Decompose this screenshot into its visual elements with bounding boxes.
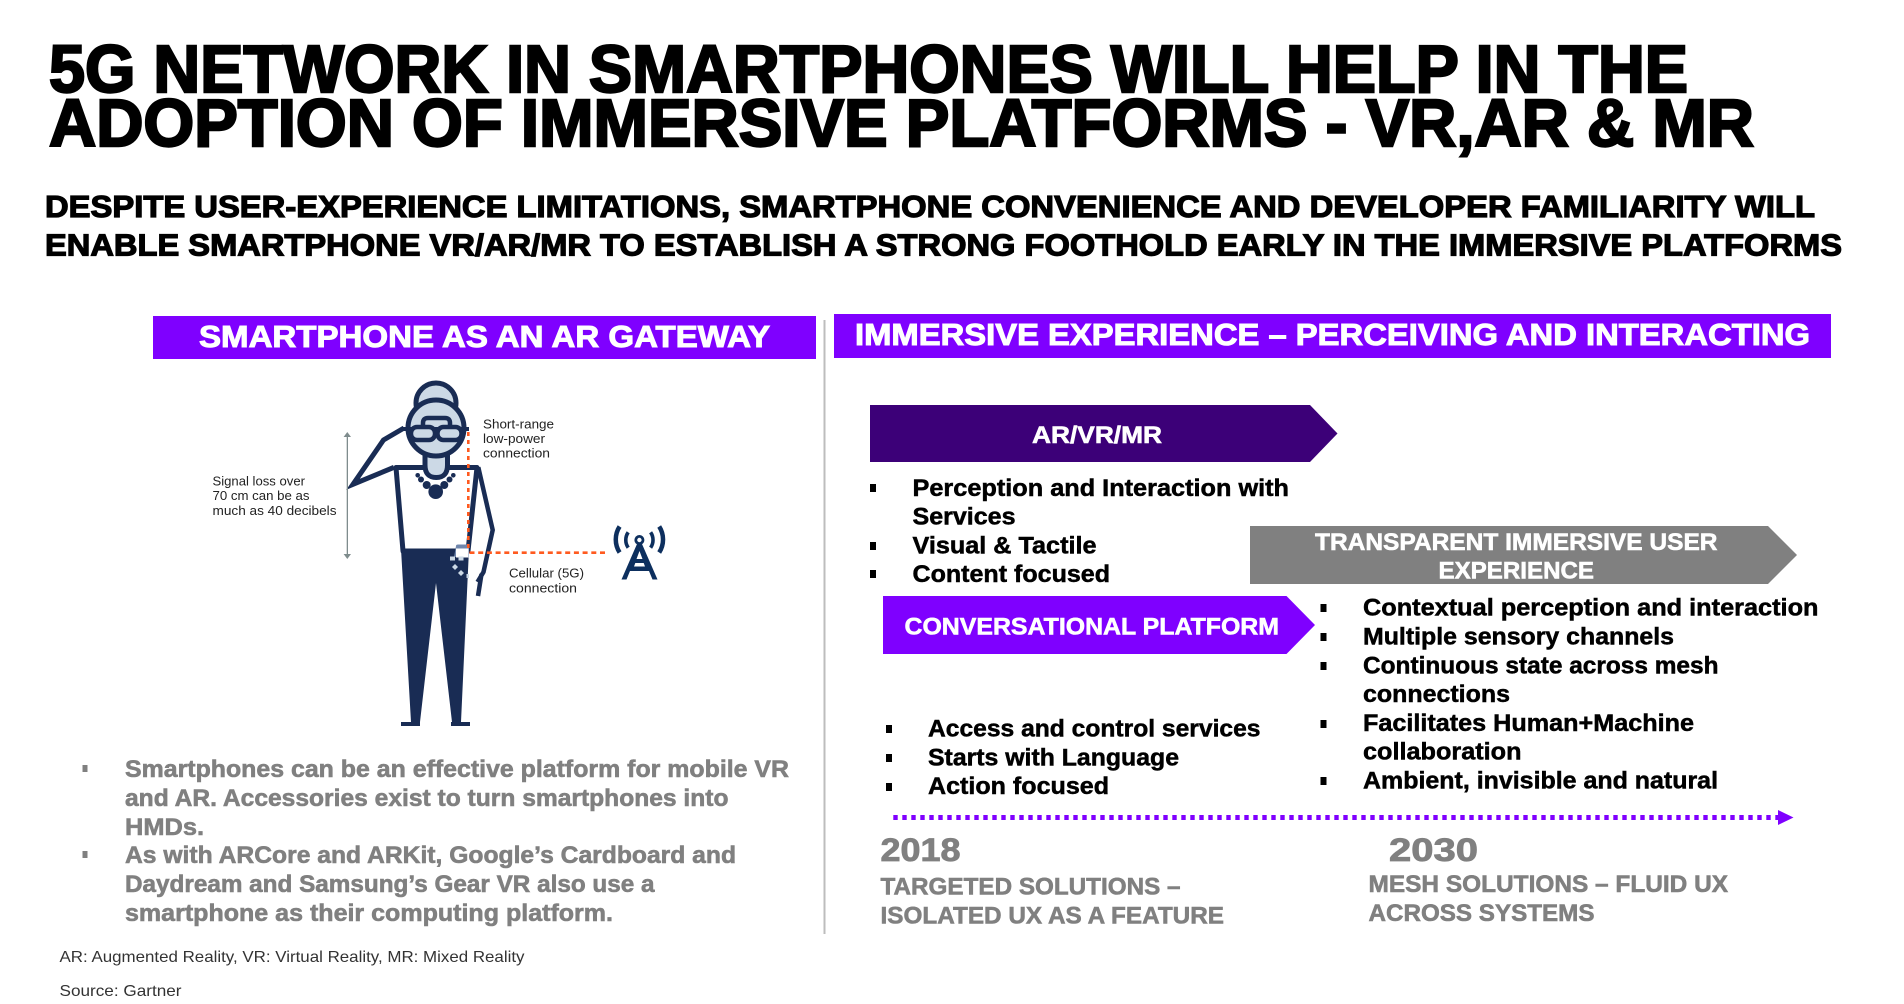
label: 2030: 2030 [1389,832,1478,868]
icon: phone [450,544,469,578]
arrow: transparent immersive user experience: EXPERIENCE [1438,558,1594,584]
label: cellular connection: Cellular (5G) [509,566,584,580]
list: transparent immersive traits [1320,594,1818,794]
label: cellular connection: connection [509,580,577,596]
torso [396,468,477,551]
list: conversational traits: Access and control services [928,716,1260,742]
neck [425,450,448,478]
list: conversational traits: Starts with Language [928,744,1179,772]
arrow: conversational platform [883,596,1315,654]
figure: person with smartphone [353,383,493,726]
label: short-range connection: connection [483,446,550,460]
text: mesh solutions [1368,871,1728,927]
subtitle: ENABLE SMARTPHONE VR/AR/MR TO ESTABLISH A STRONG FOOTHOLD EARLY IN THE IMMERSIVE PLATFORMS [45,228,1842,262]
heading: smartphone as an AR gateway [153,316,816,359]
list: transparent immersive traits: collaboration [1363,738,1522,766]
text block: smartphone platform notes: Daydream and Samsung’s Gear VR also use a [125,871,655,898]
text block: smartphone platform notes: and AR. Accessories exist to turn smartphones into [125,785,728,812]
heading: immersive experience: IMMERSIVE EXPERIENCE – PERCEIVING AND INTERACTING [855,317,1810,352]
text: mesh solutions: MESH SOLUTIONS – FLUID UX [1368,871,1728,898]
icon: head [408,400,464,456]
footnote: source: Source: Gartner [60,983,182,1000]
arrow: transparent immersive user experience: TRANSPARENT IMMERSIVE USER [1315,529,1718,556]
label: short-range connection: Short-range [483,416,554,432]
panel: smartphone as an AR gateway [82,316,816,927]
icon: hair bun [416,383,456,423]
pants [401,549,470,726]
list: AR/VR/MR traits: Perception and Interaction with [912,475,1289,502]
icon: cell tower [616,526,663,580]
text block: smartphone platform notes: HMDs. [125,814,204,841]
arrow: timeline [893,810,1794,825]
list: transparent immersive traits: Ambient, invisible and natural [1363,768,1718,794]
list: conversational traits: Action focused [928,773,1109,800]
list: AR/VR/MR traits: Visual & Tactile [912,532,1096,560]
list: transparent immersive traits: Continuous state across mesh [1363,652,1718,680]
title: 5G NETWORK IN SMARTPHONES WILL HELP IN THE [49,32,1688,107]
list: AR/VR/MR traits: Content focused [912,561,1110,588]
text: targeted solutions [880,874,1224,930]
label: 2018: 2018 [880,832,960,868]
short-range connection line [467,432,470,552]
label: short-range connection [483,416,554,460]
raised arm [353,428,404,484]
list: transparent immersive traits: Facilitates Human+Machine [1363,710,1694,737]
text: targeted solutions: ISOLATED UX AS A FEATURE [880,902,1224,930]
title [49,32,1754,161]
heading: smartphone as an AR gateway: SMARTPHONE AS AN AR GATEWAY [199,319,770,354]
title: ADOPTION OF IMMERSIVE PLATFORMS - VR,AR & MR [49,86,1754,161]
list: transparent immersive traits: Multiple sensory channels [1363,624,1674,650]
arrow: AR/VR/MR [870,405,1338,462]
label: signal loss: much as 40 decibels [212,503,337,518]
footnote: abbreviations: AR: Augmented Reality, VR: Virtual Reality, MR: Mixed Reality [60,949,524,966]
list: transparent immersive traits: Contextual perception and interaction [1363,594,1818,622]
list: conversational traits [886,716,1260,800]
text block: smartphone platform notes [82,756,789,927]
text block: smartphone platform notes: Smartphones can be an effective platform for mobile VR [125,756,789,783]
lowered arm [478,467,493,596]
text: targeted solutions: TARGETED SOLUTIONS – [880,874,1180,900]
label: signal loss: Signal loss over [212,474,306,488]
subtitle [45,189,1842,262]
label: cellular connection [509,566,584,596]
list: transparent immersive traits: connections [1363,681,1510,708]
arrow: conversational platform: CONVERSATIONAL PLATFORM [904,614,1279,640]
icon: glasses [403,418,469,440]
necklace [415,473,456,499]
text block: smartphone platform notes: As with ARCore and ARKit, Google’s Cardboard and [125,842,736,869]
list: AR/VR/MR traits: Services [912,504,1016,530]
cellular connection line [470,551,608,554]
panel: immersive experience [834,314,1831,930]
list: AR/VR/MR traits [870,475,1289,588]
label: signal loss [212,474,337,518]
label: short-range connection: low-power [483,431,546,446]
text block: smartphone platform notes: smartphone as their computing platform. [125,900,613,927]
text: mesh solutions: ACROSS SYSTEMS [1368,900,1594,927]
arrow: signal distance [344,432,351,559]
subtitle: DESPITE USER-EXPERIENCE LIMITATIONS, SMARTPHONE CONVENIENCE AND DEVELOPER FAMILIARITY WILL [45,189,1815,224]
arrow: AR/VR/MR: AR/VR/MR [1032,422,1162,449]
label: signal loss: 70 cm can be as [212,488,310,503]
arrow: transparent immersive user experience [1250,526,1797,584]
